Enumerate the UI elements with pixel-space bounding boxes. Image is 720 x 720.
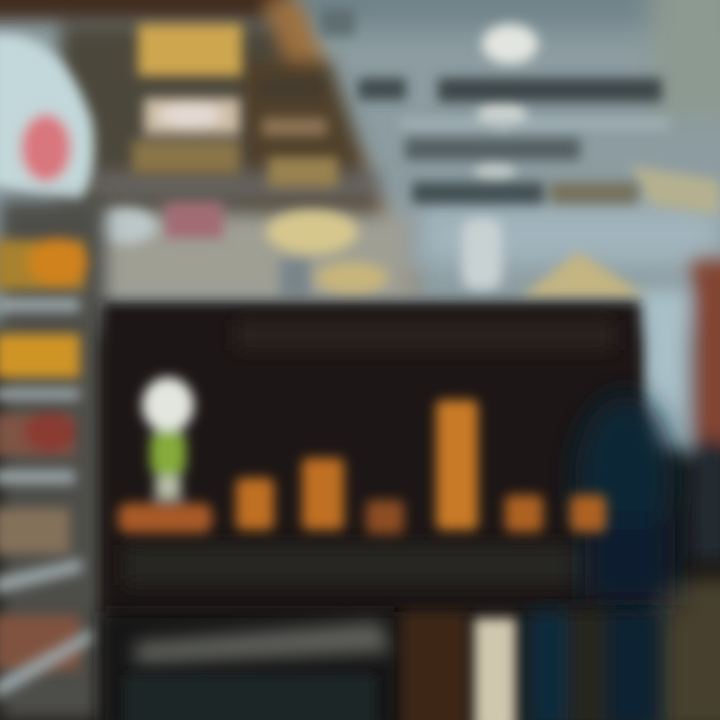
upper left store wall bbox=[0, 0, 420, 300]
right side background bbox=[640, 260, 720, 720]
hourglass icon bbox=[118, 377, 212, 533]
person in blue jacket bbox=[575, 395, 675, 605]
display board bbox=[102, 302, 675, 612]
legs and floor bbox=[528, 610, 662, 720]
ceiling background bbox=[0, 0, 720, 330]
light aisle bbox=[474, 618, 516, 720]
wooden floor bbox=[402, 612, 466, 720]
board lower band bbox=[125, 545, 595, 585]
floor and cart bbox=[100, 612, 516, 720]
shelf products bbox=[0, 238, 88, 670]
shelf edges bbox=[0, 298, 96, 700]
hanging signs bbox=[93, 24, 388, 298]
cart handle bbox=[135, 622, 392, 664]
board header shade bbox=[235, 320, 615, 350]
ceiling lights and panels bbox=[400, 24, 720, 298]
bar chart bbox=[236, 400, 606, 534]
cart basket bbox=[125, 675, 375, 720]
left shelving bbox=[0, 200, 105, 720]
round wall sign bbox=[0, 34, 94, 205]
dark overhead sign stripes bbox=[320, 8, 662, 204]
